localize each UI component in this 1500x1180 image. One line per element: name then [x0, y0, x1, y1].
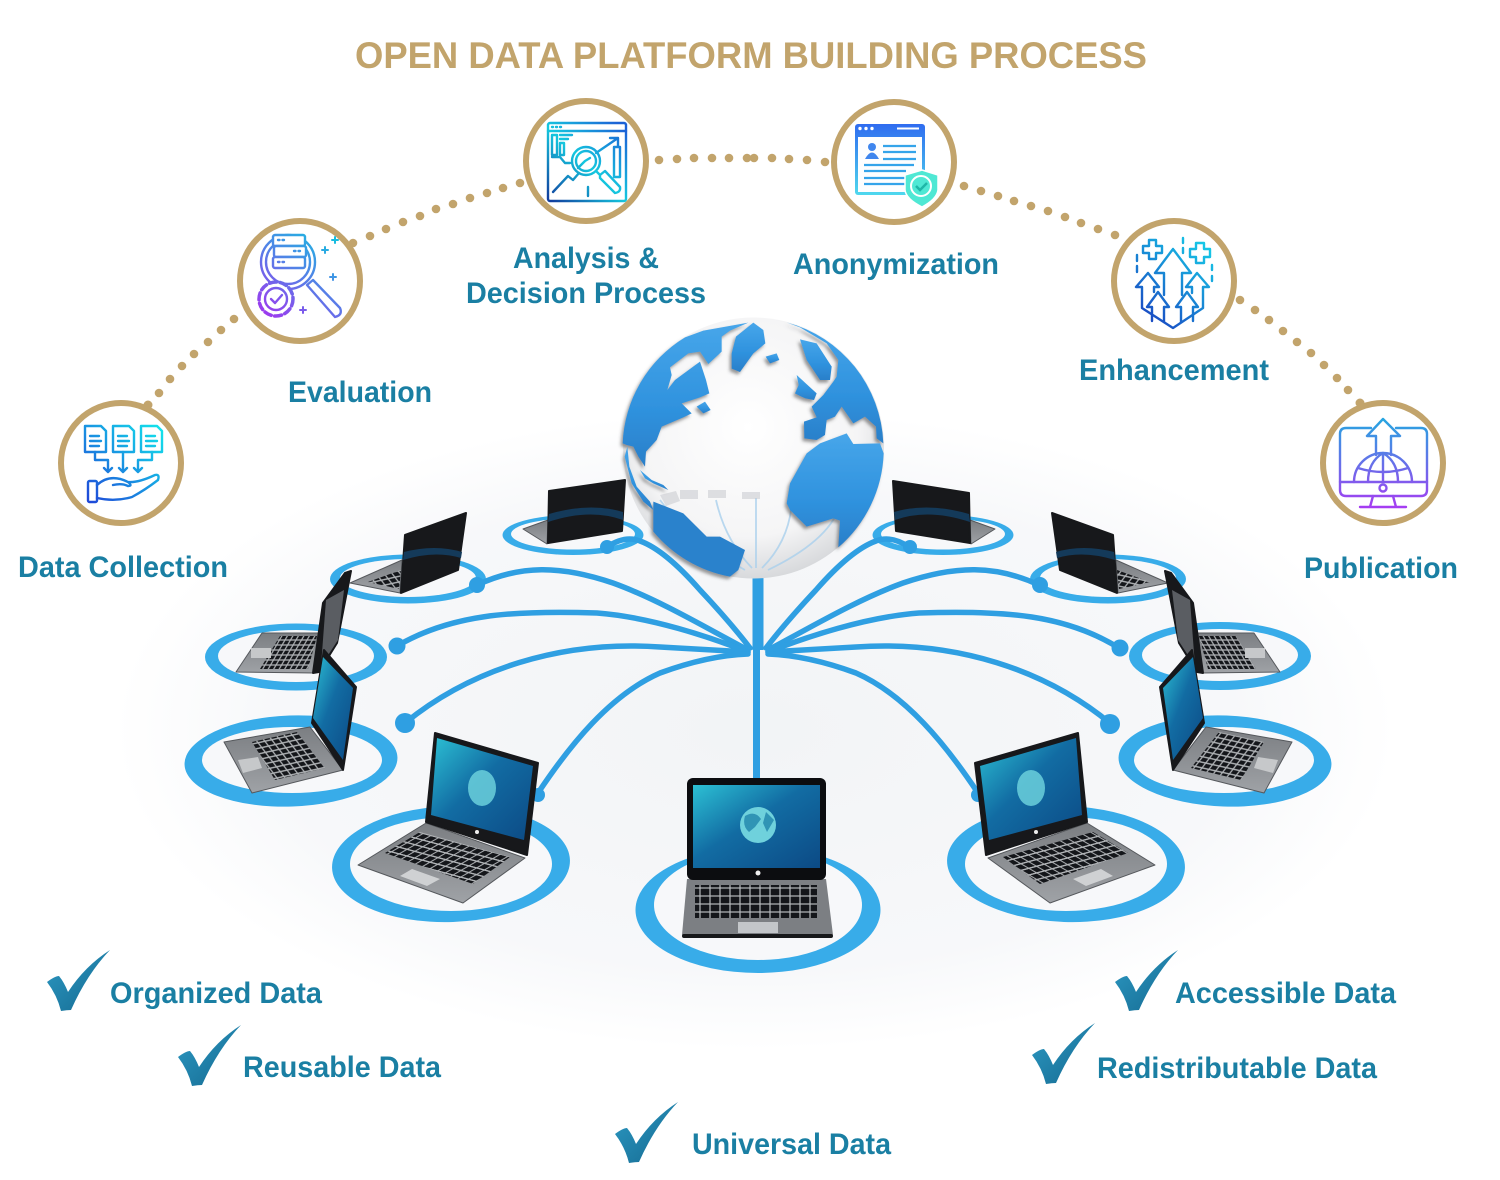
laptop: front right — [975, 733, 1155, 903]
laptop: right 4 — [1165, 571, 1280, 673]
title: OPEN DATA PLATFORM BUILDING PROCESS — [355, 35, 1147, 76]
label: Analysis & — [513, 242, 659, 275]
step: Enhancement — [1079, 221, 1269, 387]
benefit: Universal Data — [615, 1102, 891, 1163]
ring — [834, 102, 954, 222]
laptop: left 5 — [350, 513, 466, 593]
label: Reusable Data — [243, 1051, 441, 1084]
step: Analysis and Decision Process — [466, 101, 706, 310]
check icon — [47, 950, 110, 1011]
label: Organized Data — [110, 977, 322, 1010]
reflected cables on globe — [660, 498, 840, 570]
label: Enhancement — [1079, 354, 1269, 387]
check icon — [1032, 1023, 1095, 1084]
continents — [623, 322, 884, 577]
check icon — [178, 1025, 241, 1086]
step: Publication — [1304, 403, 1458, 585]
laptop: front centre — [682, 778, 833, 938]
ring pads under laptops — [183, 515, 1333, 973]
floor glow — [115, 410, 1395, 1050]
icon: upward arrows with plus signs — [1136, 238, 1212, 328]
laptop: left 3 — [224, 650, 356, 793]
network cables — [388, 539, 1128, 802]
laptop: left 4 — [236, 571, 351, 673]
benefit: Accessible Data — [1115, 950, 1396, 1011]
globe — [623, 318, 884, 578]
icon: monitor with globe and arrow — [1340, 419, 1427, 507]
label: Redistributable Data — [1097, 1052, 1377, 1085]
dotted process arc — [144, 154, 1364, 410]
label second line: Decision Process — [466, 277, 706, 310]
sphere — [623, 318, 884, 578]
label: Accessible Data — [1175, 977, 1396, 1010]
label: Publication — [1304, 552, 1458, 585]
laptop: far right back — [893, 481, 995, 544]
icon: magnifier, servers and gear — [259, 235, 341, 317]
benefit: Reusable Data — [178, 1025, 441, 1086]
label: Universal Data — [692, 1128, 891, 1161]
ring — [61, 403, 181, 523]
check icon — [1115, 950, 1178, 1011]
ring — [526, 101, 646, 221]
step: Data Collection — [18, 403, 228, 584]
icon: profile window with shield — [855, 124, 938, 207]
benefit: Redistributable Data — [1032, 1023, 1377, 1085]
ring — [1114, 221, 1234, 341]
laptop: front left — [358, 733, 538, 903]
label: Evaluation — [288, 376, 432, 409]
laptop: far left back — [523, 480, 625, 544]
ring — [240, 221, 360, 341]
reflected laptops on globe — [660, 490, 760, 506]
laptop: right 3 — [1160, 650, 1292, 793]
label: Data Collection — [18, 551, 228, 584]
benefit: Organized Data — [47, 950, 322, 1011]
label: Anonymization — [793, 248, 999, 281]
icon: documents into hand — [85, 426, 162, 502]
step: Anonymization — [793, 102, 999, 281]
icon: analytics window — [548, 123, 626, 201]
ring — [1323, 403, 1443, 523]
check icon — [615, 1102, 678, 1163]
laptop: right 5 — [1052, 513, 1168, 593]
step: Evaluation — [240, 221, 432, 409]
